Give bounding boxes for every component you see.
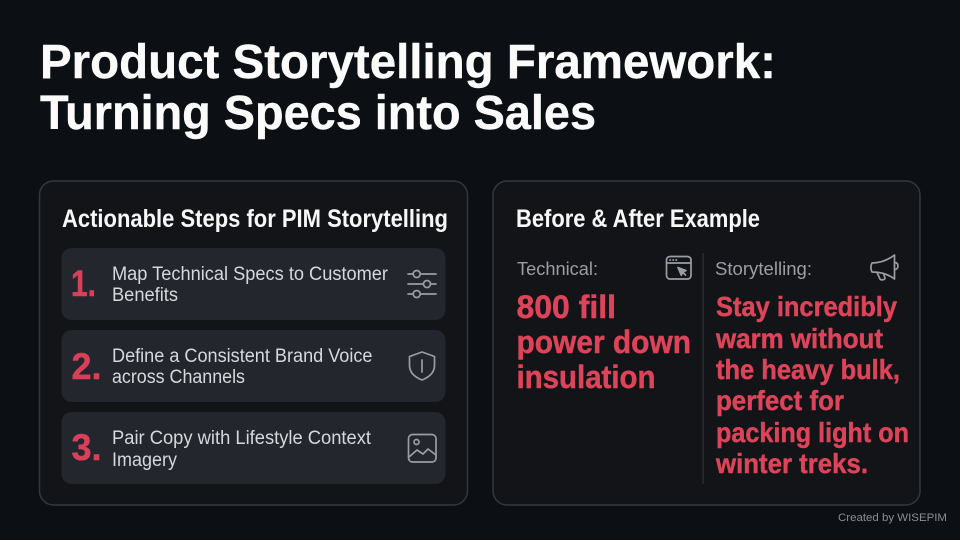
column: technical: power down — [516, 324, 691, 360]
step 2: 2. — [72, 346, 102, 387]
step 1 — [62, 248, 446, 320]
column: storytelling: warm without — [715, 323, 883, 354]
heading: actionable steps: Actionable Steps for PIM Storytelling — [62, 205, 448, 233]
title: Turning Specs into Sales — [40, 87, 596, 140]
column: technical: Technical: — [517, 258, 598, 279]
divider — [702, 253, 704, 484]
step 1: Benefits — [112, 285, 178, 306]
heading: before and after: Before & After Example — [516, 205, 760, 233]
title: Product Storytelling Framework: — [40, 36, 776, 89]
step 3: 3. — [72, 427, 102, 468]
column: storytelling: Storytelling: — [715, 258, 812, 279]
footer credit: Created by WISEPIM — [838, 512, 947, 524]
panel: actionable steps — [40, 181, 468, 505]
column: technical: insulation — [516, 359, 656, 395]
step 3: Imagery — [112, 450, 177, 471]
icon: shield — [410, 352, 434, 380]
icon: megaphone — [871, 255, 898, 280]
column: storytelling: the heavy bulk, — [716, 354, 900, 385]
column: storytelling: winter treks. — [715, 448, 868, 479]
column: storytelling: Stay incredibly — [716, 291, 897, 322]
step 2: Define a Consistent Brand Voice — [112, 346, 372, 367]
column: technical — [516, 256, 691, 395]
column: storytelling: packing light on — [716, 417, 909, 448]
column: storytelling — [715, 255, 909, 479]
icon: sliders — [408, 270, 436, 298]
title — [40, 36, 776, 140]
column: technical: 800 fill — [516, 289, 616, 325]
step 2 — [62, 330, 446, 402]
column: storytelling: perfect for — [716, 385, 844, 416]
step 2: across Channels — [112, 367, 245, 388]
step 3 — [62, 412, 446, 484]
step 1: Map Technical Specs to Customer — [112, 264, 389, 285]
icon: browser cursor — [666, 256, 691, 279]
icon: image — [408, 434, 436, 462]
step 1: 1. — [71, 263, 96, 304]
panel: before and after example — [493, 181, 920, 505]
step 3: Pair Copy with Lifestyle Context — [112, 428, 372, 449]
